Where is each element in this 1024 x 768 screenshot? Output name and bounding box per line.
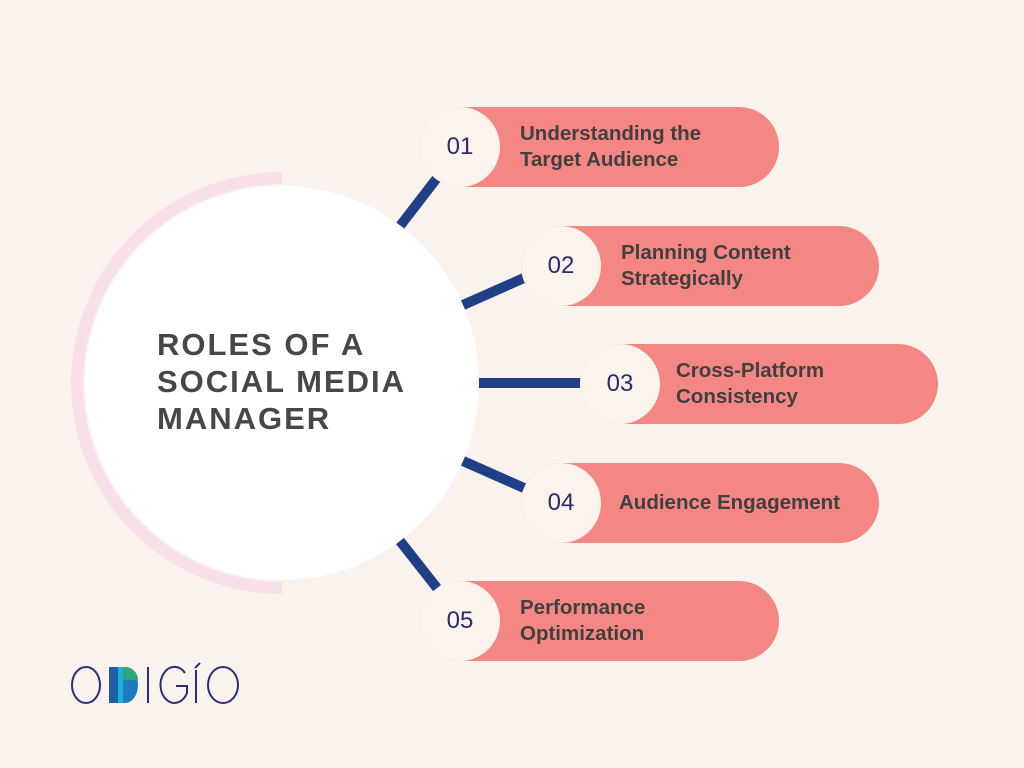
item 01	[420, 107, 779, 187]
item 04: 04	[548, 489, 574, 516]
connector lines	[400, 178, 582, 588]
item 03: Cross-Platform	[676, 359, 824, 382]
item 05: 05	[447, 607, 473, 634]
title: MANAGER	[157, 401, 331, 436]
item 02: Planning Content	[621, 241, 791, 264]
item 05: Performance	[520, 596, 645, 619]
item 01: Target Audience	[520, 148, 678, 171]
item 03: Consistency	[676, 385, 798, 408]
item 02: 02	[548, 252, 574, 279]
item 01: 01	[447, 133, 473, 160]
item 04: Audience Engagement	[619, 491, 840, 514]
title: SOCIAL MEDIA	[157, 364, 406, 399]
item 02	[521, 226, 879, 306]
title	[157, 327, 406, 436]
item 05: Optimization	[520, 622, 644, 645]
pink arc	[77, 178, 282, 588]
item 05	[420, 581, 779, 661]
title: ROLES OF A	[157, 327, 365, 362]
main circle	[85, 186, 479, 580]
item 02: Strategically	[621, 267, 743, 290]
logo	[71, 662, 239, 704]
item 01: Understanding the	[520, 122, 701, 145]
item 04	[521, 463, 879, 543]
item 03	[580, 344, 938, 424]
item 03: 03	[607, 370, 633, 397]
